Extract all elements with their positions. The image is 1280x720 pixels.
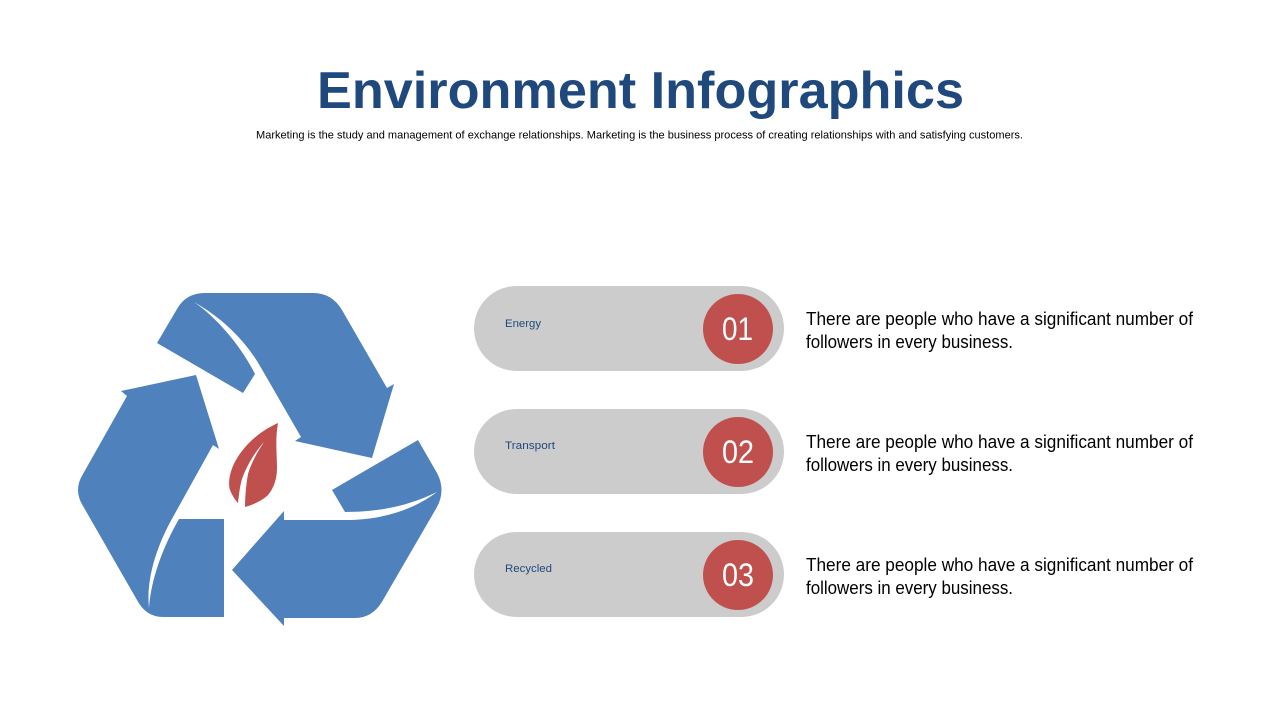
- text block: Energy description: [806, 309, 1194, 352]
- text block: Transport description: followers in every business.: [806, 455, 1013, 475]
- text block: Recycled description: followers in every business.: [806, 578, 1013, 598]
- recycling symbol: [78, 293, 442, 626]
- pill background: [474, 409, 784, 494]
- recycling arrow: top: [157, 293, 394, 458]
- number badge: [703, 417, 773, 487]
- panel: Transport: [474, 409, 784, 494]
- text block: Energy description: There are people who have a significant number of: [806, 309, 1194, 329]
- number badge: [703, 540, 773, 610]
- number: 03: [722, 557, 754, 593]
- subtitle: Marketing is the study and management of exchange relationships. Marketing is the business process of creating relationships with and satisfying customers.: [256, 130, 1023, 142]
- recycling arrow: left: [78, 375, 224, 617]
- number: 01: [722, 311, 753, 347]
- text block: Energy description: followers in every business.: [806, 332, 1013, 352]
- text block: Transport description: [806, 432, 1194, 475]
- number: 02: [722, 434, 754, 470]
- pill background: [474, 286, 784, 371]
- panel: Energy: [474, 286, 784, 371]
- recycling arrow: bottom right: [232, 440, 442, 626]
- pill background: [474, 532, 784, 617]
- icon: leaf: [229, 423, 278, 507]
- text block: Recycled description: There are people who have a significant number of: [806, 555, 1194, 575]
- label: Energy: [505, 318, 542, 330]
- title: Environment Infographics: [317, 62, 964, 120]
- text block: Recycled description: [806, 555, 1194, 598]
- label: Transport: [505, 440, 555, 452]
- panel: Recycled: [474, 532, 784, 617]
- text block: Transport description: There are people who have a significant number of: [806, 432, 1194, 452]
- label: Recycled: [505, 563, 552, 575]
- number badge: [703, 294, 773, 364]
